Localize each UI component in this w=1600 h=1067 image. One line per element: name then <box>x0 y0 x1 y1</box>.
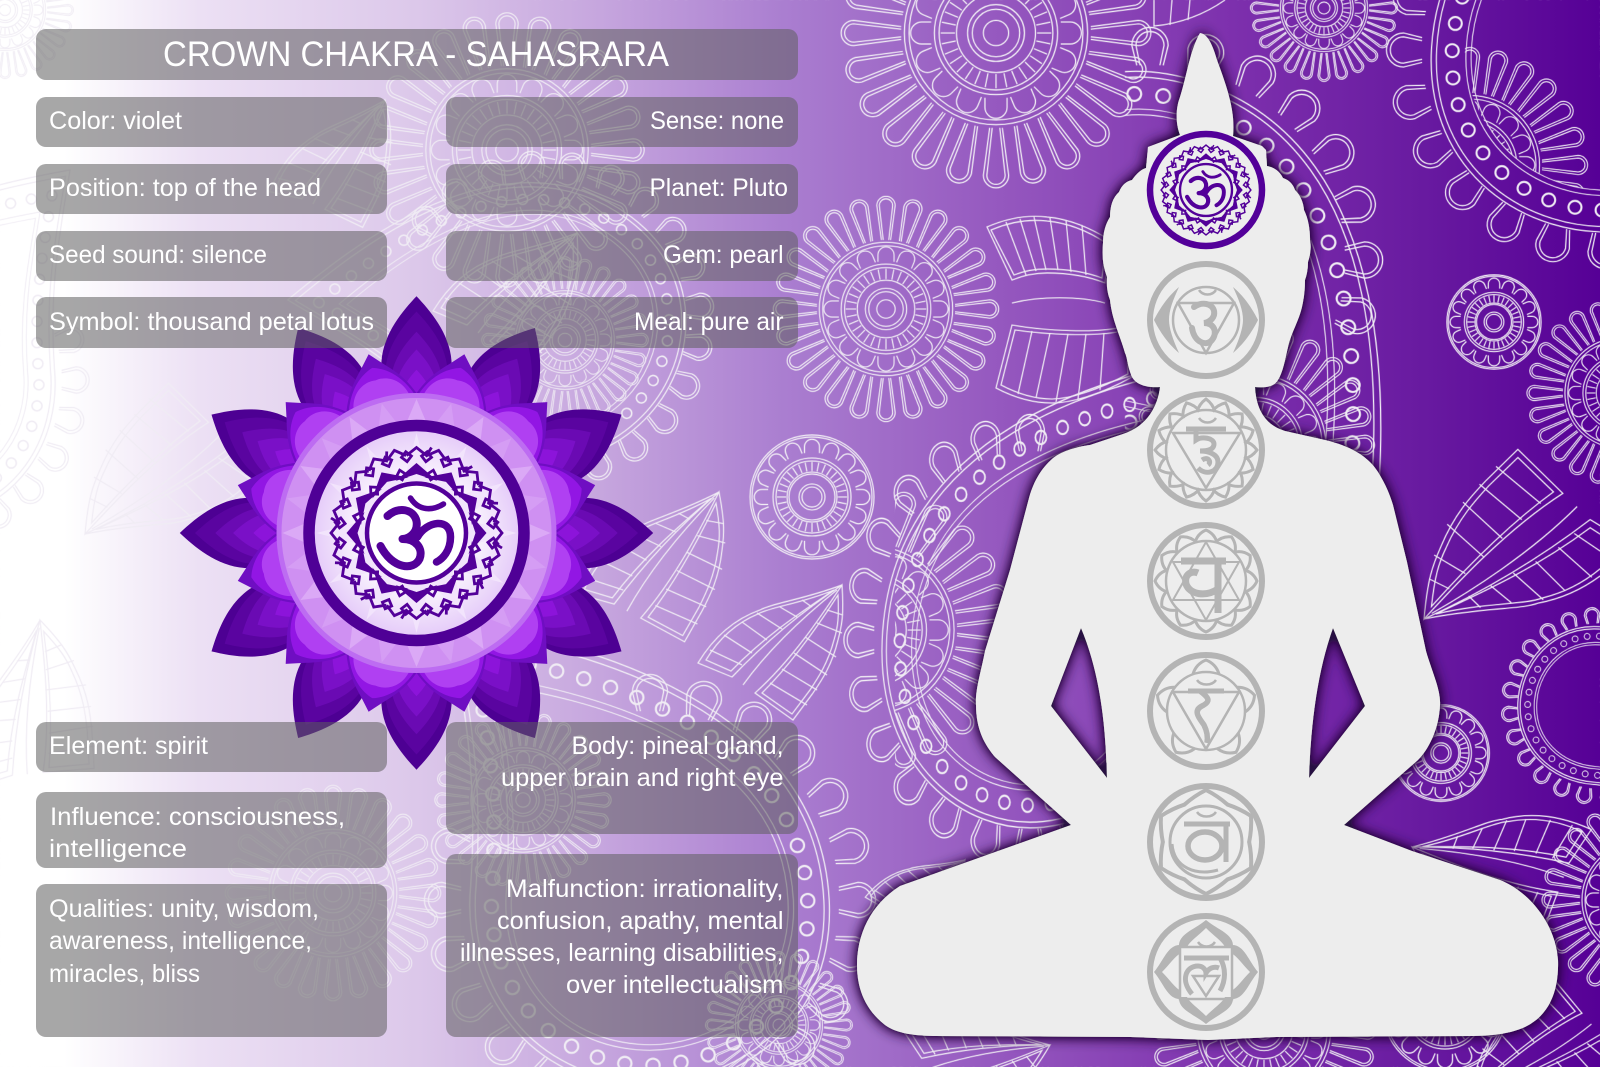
label: influence: Influence: consciousness, <box>50 803 345 831</box>
label: malfunction: confusion, apathy, mental <box>497 907 784 935</box>
icon: root chakra <box>1150 916 1262 1028</box>
icon: om emblem <box>300 416 533 650</box>
panel: planet <box>446 164 798 214</box>
icon: sacral chakra <box>1150 786 1262 898</box>
label: sense: Sense: none <box>650 107 784 135</box>
outer petals <box>93 210 740 856</box>
panel: color <box>36 97 387 147</box>
dark ring <box>309 426 524 640</box>
panel: influence <box>36 792 387 868</box>
label: qualities: miracles, bliss <box>49 960 200 988</box>
icon: solar plexus chakra <box>1150 655 1262 767</box>
panel: gem <box>446 231 798 281</box>
panel: sense <box>446 97 798 147</box>
label: meal: Meal: pure air <box>634 308 784 336</box>
light disc <box>192 309 641 757</box>
label: qualities: awareness, intelligence, <box>49 927 312 955</box>
panel: body <box>446 722 798 834</box>
label: symbol: Symbol: thousand petal lotus <box>49 308 374 336</box>
label: gem: Gem: pearl <box>663 241 784 269</box>
meditating figure silhouette <box>857 33 1558 1040</box>
label: seed sound: Seed sound: silence <box>49 241 267 269</box>
label: body: upper brain and right eye <box>501 764 784 792</box>
label: influence: intelligence <box>49 835 187 863</box>
label: qualities: Qualities: unity, wisdom, <box>49 895 319 923</box>
icon: heart chakra <box>1136 511 1276 651</box>
label: element: Element: spirit <box>49 732 208 760</box>
title panel <box>36 29 798 80</box>
icon: third eye chakra <box>1150 264 1262 376</box>
label: color: Color: violet <box>49 107 182 135</box>
inner petals <box>107 223 726 843</box>
panel: qualities <box>36 884 387 1037</box>
title: CROWN CHAKRA - SAHASRARA <box>163 35 670 74</box>
label: malfunction: Malfunction: irrationality, <box>506 875 784 903</box>
label: malfunction: illnesses, learning disabilities, <box>460 939 784 967</box>
lotus symbol <box>93 210 740 856</box>
panel: symbol <box>36 297 387 348</box>
panel: seed sound <box>36 231 387 281</box>
panel: position <box>36 164 387 214</box>
panel: malfunction <box>446 854 798 1037</box>
panel: meal <box>446 297 798 348</box>
panel: element <box>36 722 387 772</box>
label: malfunction: over intellectualism <box>566 971 784 999</box>
inner disc with rays <box>280 396 553 670</box>
label: position: Position: top of the head <box>49 174 321 202</box>
label: body: Body: pineal gland, <box>572 732 784 760</box>
icon: throat chakra <box>1112 356 1300 544</box>
label: planet: Planet: Pluto <box>650 174 788 202</box>
icon: crown chakra on figure <box>1145 129 1267 251</box>
